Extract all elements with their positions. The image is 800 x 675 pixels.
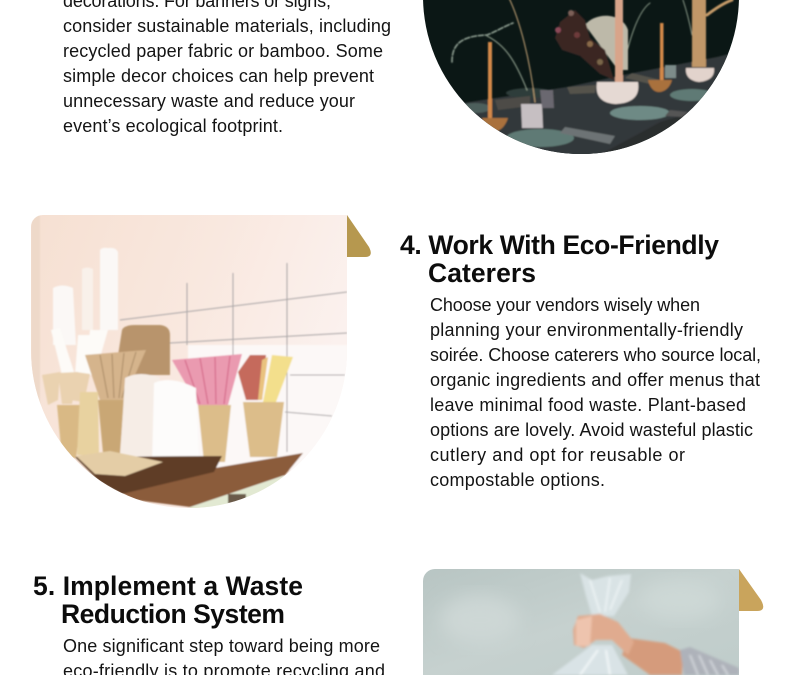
text block: tip 4 description: options are lovely. Avoid wasteful plastic — [430, 420, 753, 440]
text block: tip 3 closing paragraph: simple decor choices can help prevent — [63, 66, 374, 86]
cardboard stack — [115, 325, 170, 375]
wood sticks — [85, 350, 146, 400]
icon: gold folded corner tab — [347, 215, 371, 257]
shelf — [189, 475, 284, 508]
fan — [585, 16, 628, 70]
panel: tip 5 photo of hand holding a plastic bag — [423, 569, 763, 675]
text block: tip 3 closing paragraph — [63, 0, 391, 136]
text block: tip 4 description: Choose your vendors wisely when — [430, 295, 700, 315]
hand — [573, 614, 634, 655]
white sticks — [51, 328, 108, 375]
text block: tip 4 description: soirée. Choose caterers who source local, — [430, 345, 761, 365]
plastic bag — [580, 573, 631, 616]
sleeve — [680, 647, 739, 675]
arm — [622, 638, 683, 675]
text block: tip 4 description: cutlery and opt for reusable or — [430, 445, 685, 465]
text block: tip 3 closing paragraph: consider sustainable materials, including — [63, 16, 391, 36]
photo: table setting with candles in a circular crop — [420, 0, 745, 160]
panel: tip 4 photo of reusable cups and straws — [31, 215, 371, 520]
text block: tip 4 description — [430, 295, 761, 490]
text block: tip 3 closing paragraph: unnecessary waste and reduce your — [63, 91, 355, 111]
text block: tip 5 description: One significant step toward being more — [63, 636, 380, 656]
heading: tip 4: 4. Work With Eco-Friendly — [400, 230, 719, 260]
candles — [488, 42, 492, 118]
text block: tip 4 description: leave minimal food waste. Plant-based — [430, 395, 746, 415]
heading: tip 5: Reduction System — [61, 599, 285, 629]
text block: tip 4 description: planning your environmentally-friendly — [430, 320, 743, 340]
text block: tip 5 description — [63, 636, 385, 675]
text block: tip 3 closing paragraph: event’s ecological footprint. — [63, 116, 283, 136]
forks — [42, 372, 90, 405]
kraft cups — [57, 405, 83, 458]
tall cups — [100, 248, 118, 330]
heading: tip 5 — [33, 571, 303, 629]
text block: tip 3 closing paragraph: recycled paper fabric or bamboo. Some — [63, 41, 383, 61]
icon: gold folded corner tab — [739, 569, 763, 611]
kraft cups right — [198, 405, 231, 462]
heading: tip 4 — [400, 230, 719, 288]
vases — [597, 82, 638, 104]
heading: tip 5: 5. Implement a Waste — [33, 571, 303, 601]
pink straws — [172, 354, 242, 405]
striped straws — [238, 355, 266, 400]
heading: tip 4: Caterers — [428, 258, 536, 288]
text block: tip 4 description: organic ingredients and offer menus that — [430, 370, 760, 390]
stems — [452, 0, 732, 102]
text block: tip 4 description: compostable options. — [430, 470, 605, 490]
white stacks — [120, 373, 154, 458]
dried flowers — [555, 10, 614, 80]
